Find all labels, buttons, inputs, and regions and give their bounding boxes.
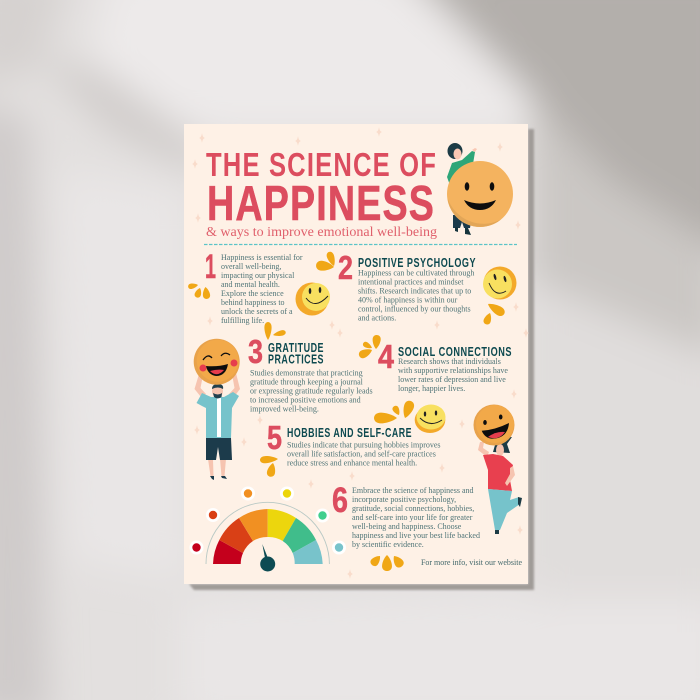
section 4: Research shows that individuals — [398, 357, 501, 366]
section 1: unlock the secrets of a — [221, 307, 293, 316]
illustration: woman with large smiley — [447, 143, 513, 235]
icon: orange splash — [374, 399, 416, 423]
illustration: man with smiley — [194, 339, 240, 480]
icon: orange splash — [369, 553, 405, 571]
section 6: Embrace the science of happiness and — [352, 486, 474, 495]
section 2: 40% of happiness is within our — [358, 296, 458, 304]
icon: orange splash — [358, 335, 381, 360]
dashed divider — [204, 244, 517, 246]
title: HAPPINESS — [207, 177, 435, 231]
poster shadow — [189, 129, 534, 590]
title — [206, 146, 437, 231]
illustration: woman with smiley — [474, 404, 522, 534]
section 3: improved well-being. — [250, 404, 319, 414]
section 5 — [260, 399, 446, 478]
icon: laughing smiley — [194, 339, 240, 385]
section 1: impacting our physical — [221, 271, 295, 280]
subtitle: & ways to improve emotional well-being — [206, 224, 437, 239]
section 2: Happiness can be cultivated through — [358, 268, 474, 278]
section 5: overall life satisfaction, and self-care practices — [287, 450, 436, 458]
icon: yellow smiley — [296, 282, 330, 316]
poster content — [188, 127, 529, 579]
section 6: 6 — [332, 481, 348, 520]
section 6: well-being and happiness. Choose — [352, 522, 462, 531]
section 3: gratitude through keeping a journal — [250, 378, 364, 386]
section 3: to increased positive emotions and — [250, 396, 361, 404]
section 3: GRATITUDE — [268, 341, 324, 355]
section 1: Happiness is essential for — [221, 253, 303, 262]
section 5: HOBBIES AND SELF-CARE — [287, 426, 412, 440]
section 3: or expressing gratitude regularly leads — [250, 386, 373, 396]
section 1: behind happiness to — [221, 298, 285, 307]
section 5: 5 — [267, 419, 282, 456]
section 3: PRACTICES — [268, 352, 324, 366]
section 5: Studies indicate that pursuing hobbies improves — [287, 440, 441, 450]
section 2: and actions. — [358, 314, 396, 322]
section 4: 4 — [378, 338, 395, 375]
icon: orange splash — [483, 300, 506, 326]
section 2: 2 — [338, 249, 353, 286]
icon: orange splash — [188, 282, 211, 299]
section 6: incorporate positive psychology, — [352, 495, 456, 504]
section 6 — [332, 481, 480, 571]
section 5: reduce stress and enhance mental health. — [287, 458, 417, 468]
section 6: gratitude, social connections, hobbies, — [352, 504, 474, 513]
section 1 — [188, 248, 330, 325]
icon: orange splash — [264, 322, 286, 340]
section 4: SOCIAL CONNECTIONS — [398, 345, 512, 359]
section 4: lower rates of depression and live — [398, 375, 506, 384]
gauge needle — [260, 544, 275, 572]
gauge chart — [190, 486, 346, 572]
section 4: longer, happier lives. — [398, 384, 465, 393]
gauge mood faces — [190, 486, 346, 554]
section 1: fulfilling life. — [221, 316, 264, 325]
icon: yellow smiley — [415, 404, 446, 433]
icon: orange splash — [260, 455, 278, 478]
title: THE SCIENCE OF — [206, 146, 437, 183]
section 1: overall well-being, — [221, 262, 281, 271]
section 3: 3 — [248, 333, 263, 370]
section 2: POSITIVE PSYCHOLOGY — [358, 256, 476, 270]
section 3 — [194, 322, 373, 480]
icon: grinning smiley — [474, 404, 514, 446]
poster panel — [184, 124, 528, 584]
section 1: and mental health. — [221, 280, 280, 289]
section 3: Studies demonstrate that practicing — [250, 368, 363, 378]
decorative sparkles — [192, 127, 529, 579]
section 2: shifts. Research indicates that up to — [358, 286, 471, 296]
icon: yellow smiley — [483, 266, 516, 300]
section 4: with supportive relationships have — [398, 366, 508, 375]
section 6: by scientific evidence. — [352, 540, 424, 549]
section 2: intentional practices and mindset — [358, 278, 464, 286]
icon: orange splash — [316, 251, 337, 272]
section 2: control, influenced by our thoughts — [358, 304, 471, 314]
section 6: and self-care into your life for greater — [352, 513, 473, 522]
section 6: happiness and live your best life backed — [352, 531, 480, 540]
section 1: 1 — [205, 248, 216, 286]
section 2 — [316, 249, 516, 326]
section 1: Explore the science — [221, 289, 284, 298]
section 4 — [358, 335, 512, 393]
icon: large smiley — [447, 161, 513, 227]
footer text: For more info, visit our website — [421, 558, 522, 567]
